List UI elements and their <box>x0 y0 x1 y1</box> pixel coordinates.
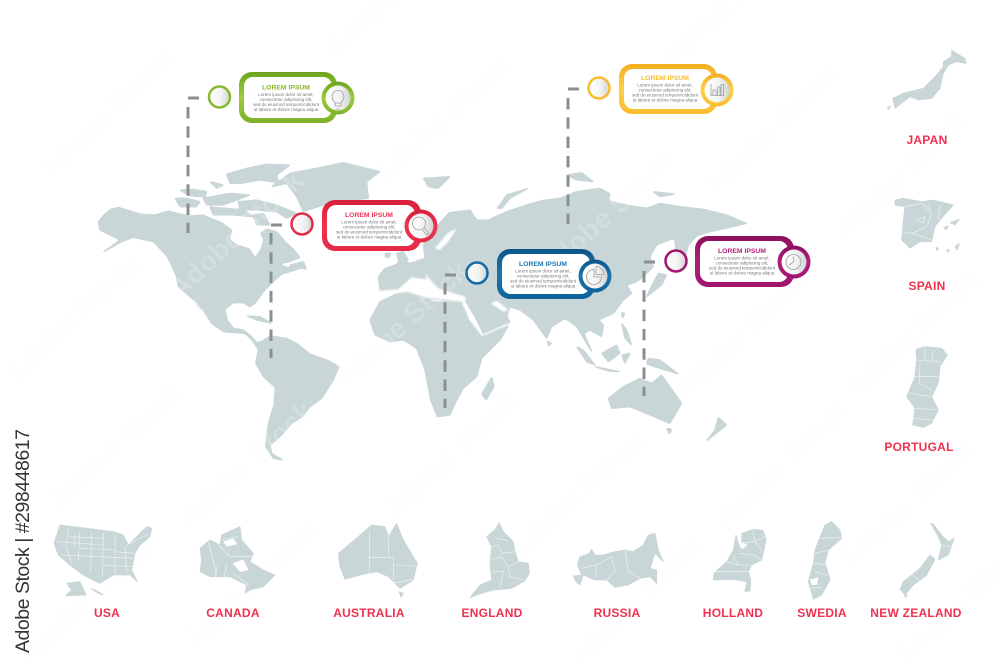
map: Australia <box>338 523 417 597</box>
watermarks: Adobe Stock <box>503 425 650 564</box>
connector: blue <box>445 275 456 408</box>
callout: blue <box>466 249 612 299</box>
country: USA <box>54 525 152 620</box>
callout: blue: ut labore et dolore magna aliqua <box>511 284 576 288</box>
country: England <box>461 523 529 620</box>
label: Australia: AUSTRALIA <box>333 606 405 620</box>
watermarks: Adobe Stock <box>163 165 310 304</box>
callout: magenta: sed do eiusmod temporincididunt <box>709 266 776 270</box>
map: Holland <box>713 529 766 592</box>
watermarks: Adobe Stock <box>698 60 845 199</box>
callout: magenta: consectetur adipiscing elit, <box>716 260 768 266</box>
watermarks: Adobe Stock <box>378 385 525 524</box>
map: Eurasia, Africa and Oceania <box>370 173 747 441</box>
callout: blue: LOREM IPSUM <box>519 261 567 268</box>
icon: bar chart <box>711 84 724 96</box>
country: Holland <box>703 529 766 620</box>
callout: yellow: LOREM IPSUM <box>641 75 689 82</box>
callout: magenta: Lorem ipsum dolor sit amet, <box>714 256 770 260</box>
callout: green: sed do eiusmod temporincididunt <box>253 102 320 107</box>
callout: green <box>209 72 354 123</box>
country: Spain <box>895 198 959 293</box>
callout: blue: sed do eiusmod temporincididunt <box>510 278 577 284</box>
icon: clock <box>786 254 801 270</box>
callout: magenta: LOREM IPSUM <box>718 248 766 255</box>
watermarks: Adobe Stock <box>178 515 325 654</box>
watermarks: Adobe Stock <box>173 395 320 534</box>
watermarks: Adobe Stock <box>328 255 475 394</box>
callout: green: consectetur adipiscing elit, <box>260 97 312 102</box>
label: Spain: SPAIN <box>908 279 946 293</box>
country: Portugal <box>884 347 954 454</box>
map: Swedia <box>808 522 842 599</box>
callout: blue: Lorem ipsum dolor sit amet, <box>515 268 571 274</box>
callout: blue: consectetur adipiscing elit, <box>517 274 569 278</box>
country: Canada <box>200 527 275 620</box>
country: Swedia <box>797 522 847 620</box>
callout: green: Lorem ipsum dolor sit amet, <box>258 92 314 97</box>
watermarks: Adobe Stock <box>708 395 855 534</box>
watermarks: Adobe Stock <box>0 250 145 389</box>
country: Japan <box>887 50 966 147</box>
callout: red: ut labore et dolore magna aliqua <box>337 234 402 240</box>
label: Canada: CANADA <box>206 606 260 620</box>
watermarks: Adobe Stock <box>833 435 980 574</box>
icon: magnifier <box>412 217 429 235</box>
world map <box>98 163 747 460</box>
label: Holland: HOLLAND <box>703 606 763 620</box>
map: New Zealand <box>900 523 954 598</box>
watermarks: Adobe Stock <box>33 45 180 184</box>
label: Swedia: SWEDIA <box>797 606 847 620</box>
callout: yellow: sed do eiusmod temporincididunt <box>632 92 699 98</box>
callout: red: LOREM IPSUM <box>345 212 393 219</box>
callout: magenta <box>666 236 810 287</box>
callout: red: sed do eiusmod temporincididunt <box>336 230 403 234</box>
map: Canada <box>200 527 275 593</box>
label: Japan: JAPAN <box>906 133 948 147</box>
map: Russia <box>573 533 663 587</box>
watermarks: Adobe Stock <box>43 375 190 514</box>
country: Russia <box>573 533 663 620</box>
callout: yellow: consectetur adipiscing elit, <box>639 88 691 92</box>
watermarks: Adobe Stock <box>533 145 680 284</box>
watermarks: Adobe Stock <box>828 105 975 244</box>
icon: pie chart <box>587 266 604 284</box>
icon: light bulb <box>332 90 344 109</box>
label: England: ENGLAND <box>461 606 523 620</box>
country: New Zealand <box>870 523 962 620</box>
callout: yellow: Lorem ipsum dolor sit amet, <box>637 82 693 88</box>
country: Australia <box>333 523 417 620</box>
map: Japan <box>887 50 966 109</box>
watermarks: Adobe Stock <box>838 265 985 404</box>
callout: red: consectetur adipiscing elit, <box>343 224 395 230</box>
label: Portugal: PORTUGAL <box>884 440 954 454</box>
callout: red <box>292 200 438 251</box>
callout: green: LOREM IPSUM <box>262 84 310 92</box>
callout: green: ut labore et dolore magna aliqua <box>254 107 319 112</box>
map: Spain <box>895 198 959 252</box>
map: USA <box>54 525 152 596</box>
label: New Zealand: NEW ZEALAND <box>870 606 962 620</box>
map: England <box>470 523 529 598</box>
label: USA: USA <box>94 606 120 620</box>
map: Americas <box>98 163 380 460</box>
watermarks: Adobe Stock <box>368 50 515 189</box>
callout: yellow: ut labore et dolore magna aliqua <box>633 98 698 102</box>
callout: magenta: ut labore et dolore magna aliqua <box>710 270 775 276</box>
connector: green <box>188 98 199 233</box>
watermarks: Adobe Stock <box>668 265 815 404</box>
map: Portugal <box>907 347 947 427</box>
connector: yellow <box>568 89 579 224</box>
label: Russia: RUSSIA <box>594 606 641 620</box>
stock id side text: Adobe Stock | #298448617 <box>12 429 34 653</box>
callout: red: Lorem ipsum dolor sit amet, <box>341 220 397 224</box>
connector: magenta <box>644 262 655 396</box>
callout: yellow <box>588 64 734 114</box>
connector: red <box>271 225 282 358</box>
